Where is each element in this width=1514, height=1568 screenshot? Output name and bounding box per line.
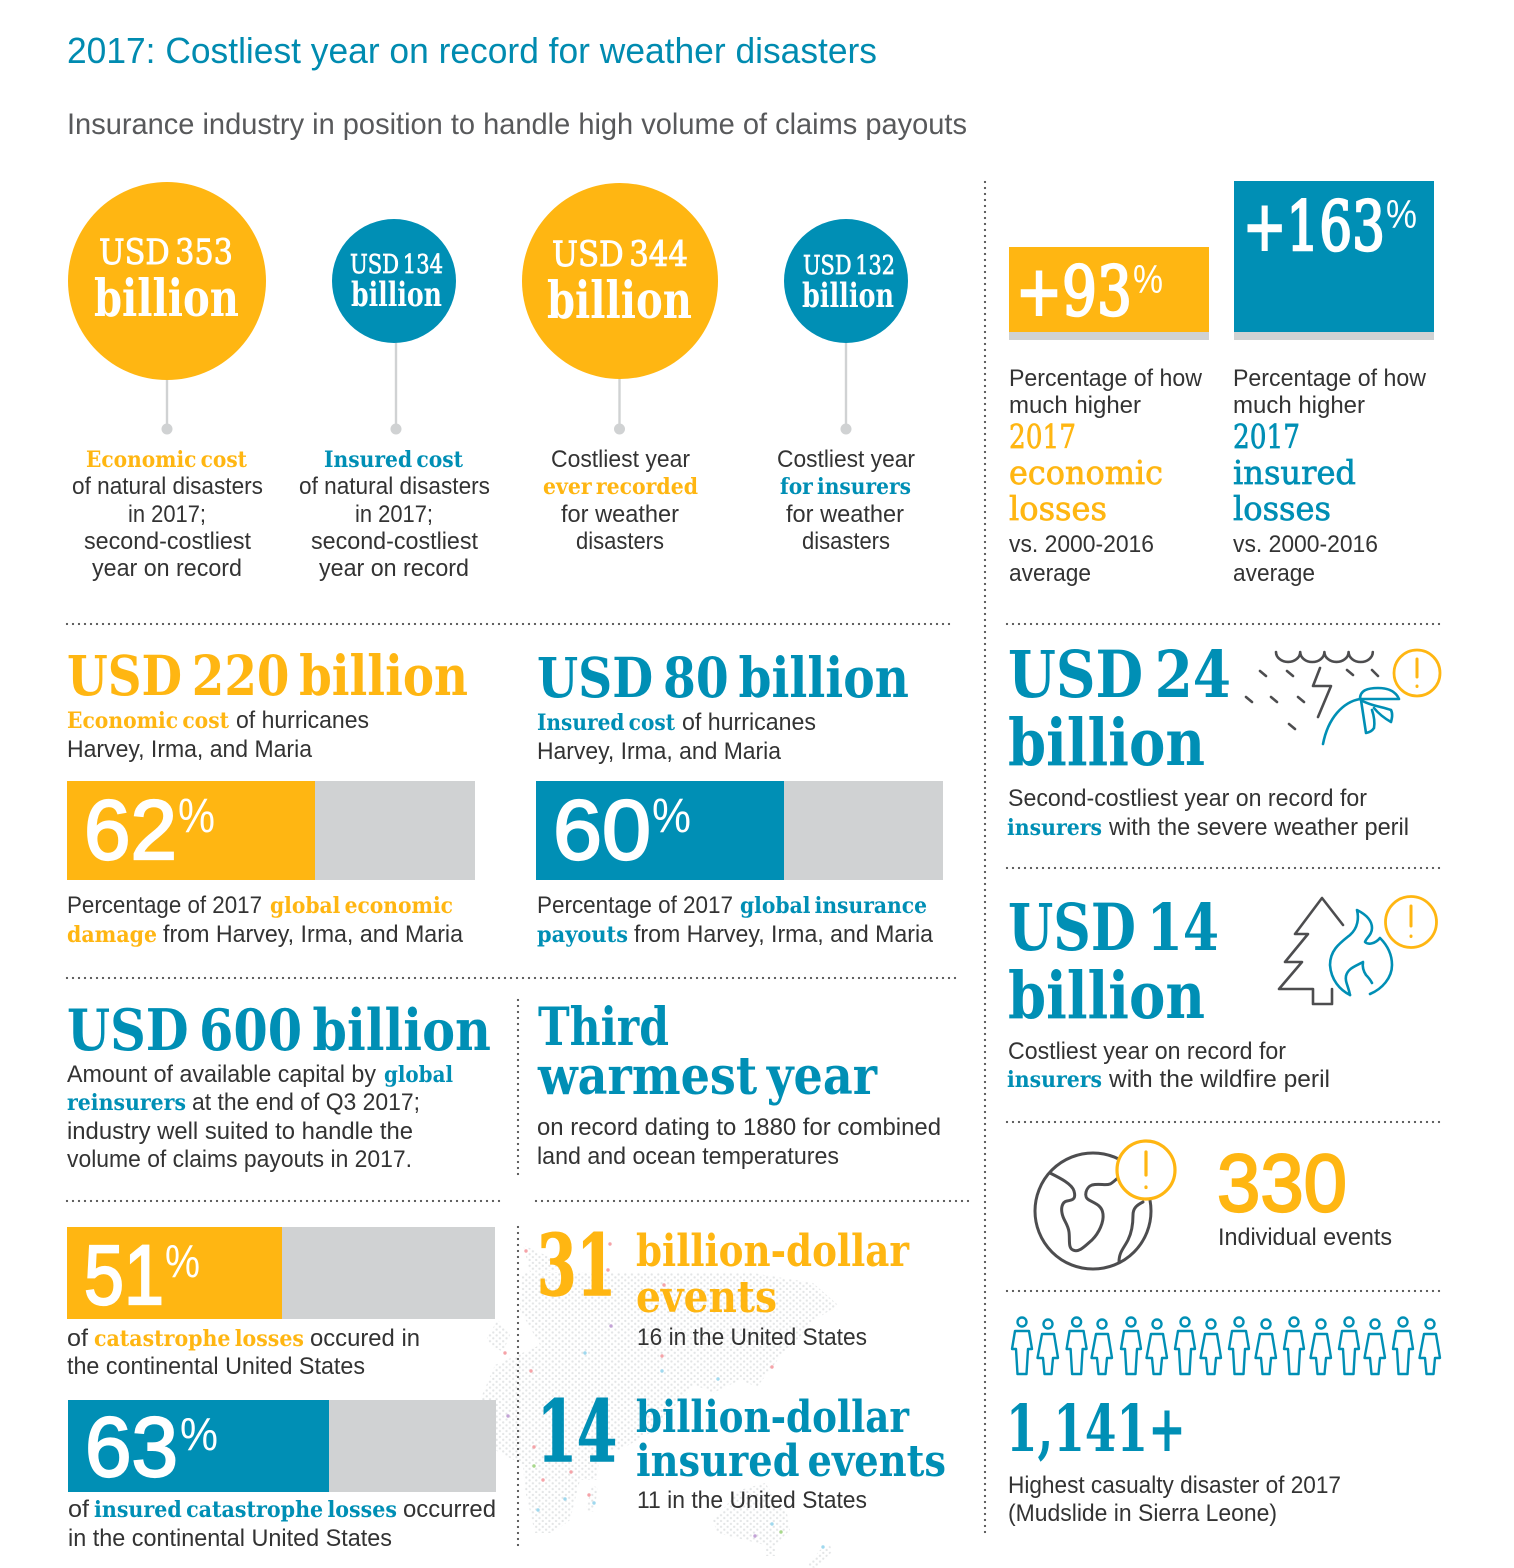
caption: global economic	[270, 893, 453, 919]
panel: insured cost circle: USD 134	[350, 250, 443, 280]
number: 14	[537, 1382, 617, 1481]
description	[1008, 1472, 1341, 1527]
caption: of	[67, 1325, 88, 1352]
caption: the continental United States	[67, 1353, 365, 1380]
bar: 62%: 62	[84, 783, 177, 877]
description: vs. 2000-2016	[1233, 531, 1378, 558]
panel: USD 24 billion severe weather	[1007, 637, 1440, 841]
label: billion-dollar	[636, 1392, 910, 1443]
caption: occured in	[310, 1325, 420, 1352]
description: with the severe weather peril	[1108, 814, 1409, 841]
caption: year on record	[92, 555, 242, 582]
bar: 62%: %	[178, 790, 215, 843]
panel: +93% economic losses	[1009, 247, 1209, 587]
number: 330	[1217, 1138, 1347, 1229]
caption: in 2017;	[355, 501, 433, 528]
icon: globe with alert	[1035, 1141, 1175, 1269]
description: Highest casualty disaster of 2017	[1008, 1472, 1341, 1499]
caption: in the continental United States	[68, 1525, 392, 1552]
panel: 63% insured catastrophe losses	[68, 1400, 496, 1552]
caption: of natural disasters	[299, 473, 490, 500]
panel: economic cost circle: billion	[94, 269, 239, 329]
description	[537, 709, 816, 765]
dotted dividers	[67, 182, 1441, 1548]
caption: Costliest year	[777, 446, 915, 473]
caption: global insurance	[740, 893, 927, 919]
icon: burning tree with alert	[1279, 896, 1436, 1004]
description: on record dating to 1880 for combined	[537, 1114, 941, 1141]
circle	[784, 219, 908, 343]
description: Harvey, Irma, and Maria	[537, 738, 782, 765]
bar: +163	[1243, 188, 1385, 267]
panel: USD 600 billion available capital	[67, 997, 491, 1173]
description: economic	[1009, 453, 1163, 492]
heading: warmest year	[537, 1046, 878, 1107]
description: losses	[1009, 489, 1107, 528]
bar: 63%: %	[180, 1408, 218, 1460]
bar: 51%	[67, 1227, 495, 1322]
caption: insured catastrophe losses	[94, 1497, 397, 1523]
panel: 51% catastrophe losses	[67, 1227, 495, 1380]
bar: 51%: 51	[84, 1228, 164, 1322]
panel: insured cost circle: billion	[351, 275, 442, 315]
heading	[1008, 890, 1219, 1034]
label: insured events	[636, 1436, 946, 1487]
panel: casualties	[1006, 1318, 1440, 1527]
caption: of	[68, 1496, 89, 1523]
description: Percentage of how	[1233, 365, 1427, 392]
caption	[72, 447, 263, 582]
description: 2017	[1009, 417, 1076, 456]
label: billion-dollar	[636, 1226, 910, 1277]
circle	[332, 219, 456, 343]
description: volume of claims payouts in 2017.	[67, 1146, 412, 1173]
description	[1007, 785, 1409, 841]
bar: 51%: %	[165, 1235, 200, 1287]
caption	[67, 892, 464, 948]
caption: for weather	[561, 501, 679, 528]
caption: second-costliest	[84, 528, 251, 555]
bar: 60%: 60	[553, 783, 651, 877]
caption	[299, 447, 490, 582]
heading: USD 600 billion	[67, 997, 491, 1064]
description: land and ocean temperatures	[537, 1143, 839, 1170]
description	[1233, 365, 1427, 587]
caption: in 2017;	[128, 501, 206, 528]
description: Harvey, Irma, and Maria	[67, 736, 313, 763]
description: vs. 2000-2016	[1009, 531, 1154, 558]
description: Insured cost	[537, 710, 676, 736]
stem	[166, 378, 168, 429]
description: Economic cost	[67, 708, 230, 734]
panel: +163% insured losses	[1233, 181, 1434, 587]
circle	[68, 182, 266, 380]
caption: Costliest year	[551, 446, 690, 473]
label: Individual events	[1218, 1224, 1392, 1251]
caption: damage	[67, 922, 157, 948]
panel: 330 individual events	[1035, 1138, 1392, 1269]
description: reinsurers	[67, 1090, 186, 1116]
caption: second-costliest	[311, 528, 478, 555]
description: with the wildfire peril	[1108, 1066, 1330, 1093]
panel: costliest insurers circle: billion	[802, 276, 894, 316]
panel: USD 80 billion insured cost of hurricanes	[536, 645, 943, 948]
caption: for insurers	[780, 474, 911, 500]
panel: economic cost circle	[68, 182, 266, 582]
caption: disasters	[802, 528, 890, 555]
label: 16 in the United States	[637, 1324, 867, 1351]
caption	[67, 1325, 420, 1380]
caption: payouts	[537, 922, 628, 948]
description: Amount of available capital by	[67, 1061, 376, 1088]
description: losses	[1233, 489, 1331, 528]
bar	[1234, 181, 1434, 340]
description: industry well suited to handle the	[67, 1118, 413, 1145]
bar: 60%: %	[652, 790, 691, 843]
caption: Percentage of 2017	[537, 892, 733, 919]
caption	[68, 1496, 496, 1552]
label	[636, 1392, 946, 1514]
bar: 63%: 63	[85, 1400, 178, 1494]
panel: USD 14 billion wildfire	[1007, 890, 1436, 1093]
description: (Mudslide in Sierra Leone)	[1008, 1500, 1277, 1527]
panel: costliest insurers circle: USD 132	[803, 251, 895, 281]
caption: catastrophe losses	[94, 1326, 304, 1352]
heading: USD 24	[1008, 637, 1231, 713]
description: Costliest year on record for	[1008, 1038, 1286, 1065]
caption: Insured cost	[324, 447, 464, 473]
panel: costliest year circle: billion	[547, 271, 692, 331]
description: insured	[1233, 453, 1356, 492]
heading: USD 14	[1008, 890, 1219, 966]
panel: insured cost circle	[299, 219, 490, 582]
icon: storm with alert	[1246, 650, 1440, 744]
number: 31	[537, 1216, 616, 1315]
caption: occurred	[403, 1496, 496, 1523]
stem	[618, 377, 621, 429]
description	[537, 1114, 941, 1170]
heading: USD 80 billion	[537, 645, 909, 710]
description: at the end of Q3 2017;	[192, 1089, 420, 1116]
caption: year on record	[319, 555, 469, 582]
description	[1009, 365, 1203, 587]
description: much higher	[1009, 392, 1141, 419]
subtitle: Insurance industry in position to handle high volume of claims payouts	[67, 108, 967, 141]
heading: billion	[1008, 705, 1205, 781]
circle	[522, 183, 718, 379]
description: insurers	[1007, 815, 1102, 841]
heading: billion	[1008, 958, 1205, 1034]
panel: 31 billion-dollar events	[537, 1216, 910, 1351]
heading	[1008, 637, 1231, 781]
caption: of natural disasters	[72, 473, 263, 500]
bar: 63%	[68, 1400, 496, 1494]
label	[636, 1226, 910, 1351]
panel: economic cost circle: USD 353	[99, 233, 233, 273]
icon: row of people	[1012, 1318, 1440, 1374]
caption: from Harvey, Irma, and Maria	[634, 921, 934, 948]
description: average	[1233, 560, 1315, 587]
description	[67, 707, 369, 763]
description: Percentage of how	[1009, 365, 1203, 392]
number: 1,141+	[1006, 1391, 1186, 1467]
description: of hurricanes	[236, 707, 369, 734]
title: 2017: Costliest year on record for weather disasters	[67, 30, 877, 71]
world map background	[480, 1242, 838, 1568]
caption: for weather	[786, 501, 904, 528]
description	[1007, 1038, 1330, 1093]
description: global	[384, 1062, 453, 1088]
caption	[543, 446, 698, 555]
caption: from Harvey, Irma, and Maria	[163, 921, 464, 948]
bar: 62%	[67, 781, 475, 880]
panel: 14 billion-dollar insured events	[537, 1382, 946, 1514]
description: much higher	[1233, 392, 1365, 419]
description: average	[1009, 560, 1091, 587]
caption: disasters	[576, 528, 664, 555]
stem	[845, 341, 847, 429]
bar: 60%	[536, 781, 943, 880]
caption: Economic cost	[86, 447, 248, 473]
description	[67, 1061, 453, 1173]
panel: costliest insurers circle	[777, 219, 915, 555]
description: Second-costliest year on record for	[1008, 785, 1367, 812]
bar: %	[1133, 258, 1163, 302]
caption: Percentage of 2017	[67, 892, 262, 919]
bar: %	[1386, 193, 1417, 237]
panel: USD 220 billion economic cost of hurricanes	[67, 643, 475, 948]
heading: Third	[538, 997, 669, 1058]
panel: third warmest year	[537, 997, 941, 1170]
description: 2017	[1233, 417, 1300, 456]
panel: costliest year circle: USD 344	[552, 235, 688, 275]
heading	[537, 997, 878, 1107]
caption	[537, 892, 934, 948]
heading: USD 220 billion	[67, 643, 468, 708]
description: of hurricanes	[682, 709, 816, 736]
bar	[1009, 247, 1209, 340]
caption: ever recorded	[543, 474, 698, 500]
caption	[777, 446, 915, 555]
label: 11 in the United States	[637, 1487, 867, 1514]
bar: +93	[1016, 253, 1132, 332]
label: events	[636, 1272, 777, 1323]
panel: costliest year circle	[522, 183, 718, 555]
stem	[395, 341, 397, 429]
description: insurers	[1007, 1067, 1102, 1093]
